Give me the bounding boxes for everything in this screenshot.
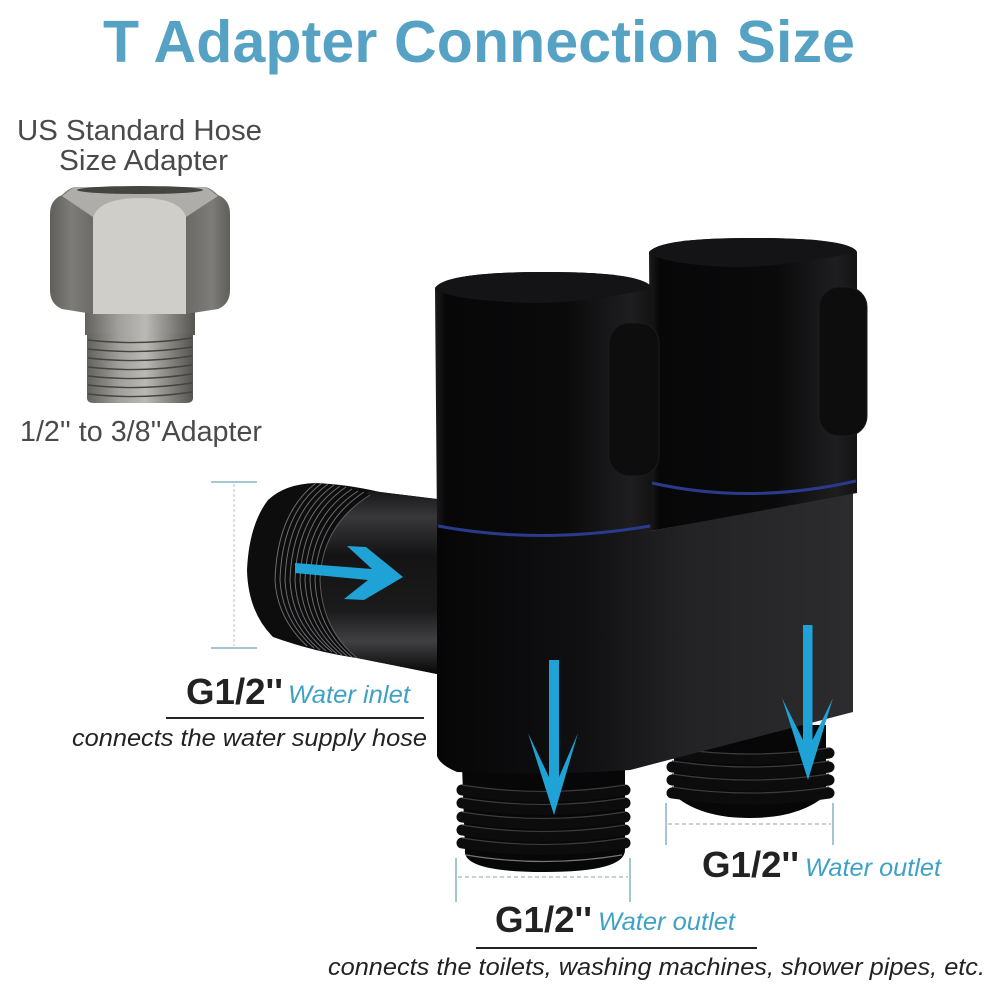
left handle	[609, 323, 659, 476]
inlet label: G1/2''	[186, 671, 283, 712]
right band	[652, 481, 856, 494]
adapter size caption: 1/2'' to 3/8''Adapter	[20, 416, 262, 448]
arrow: right outlet	[782, 625, 833, 780]
title: T Adapter Connection Size	[103, 9, 855, 75]
T adapter valve	[247, 238, 867, 872]
inlet label	[72, 671, 427, 752]
arrow: left outlet	[528, 660, 578, 815]
inlet label: connects the water supply hose	[72, 725, 427, 752]
valve body	[437, 493, 853, 774]
right outlet label: G1/2''	[702, 844, 799, 885]
left outlet label: G1/2''	[495, 899, 592, 940]
adapter heading: US Standard Hose	[17, 115, 262, 147]
adapter heading: Size Adapter	[59, 145, 228, 177]
adapter heading	[17, 115, 262, 177]
left outlet dimension	[456, 858, 630, 902]
left band	[438, 526, 650, 536]
left outlet thread	[462, 765, 625, 872]
right outlet thread	[672, 725, 829, 818]
left outlet label: connects the toilets, washing machines, shower pipes, etc.	[328, 954, 985, 981]
inlet dimension marker	[211, 482, 257, 648]
arrow: water inlet	[295, 546, 403, 600]
left cylinder	[435, 272, 652, 535]
right cylinder	[649, 238, 857, 531]
right outlet label: Water outlet	[805, 854, 942, 882]
right handle	[819, 287, 867, 436]
right outlet dimension	[666, 803, 833, 845]
inlet pipe	[247, 483, 437, 674]
left outlet label	[328, 899, 985, 981]
left outlet label: Water outlet	[598, 908, 736, 936]
icon: brass hose size adapter	[50, 186, 230, 403]
right outlet label	[702, 844, 942, 885]
inlet label: Water inlet	[288, 681, 411, 709]
